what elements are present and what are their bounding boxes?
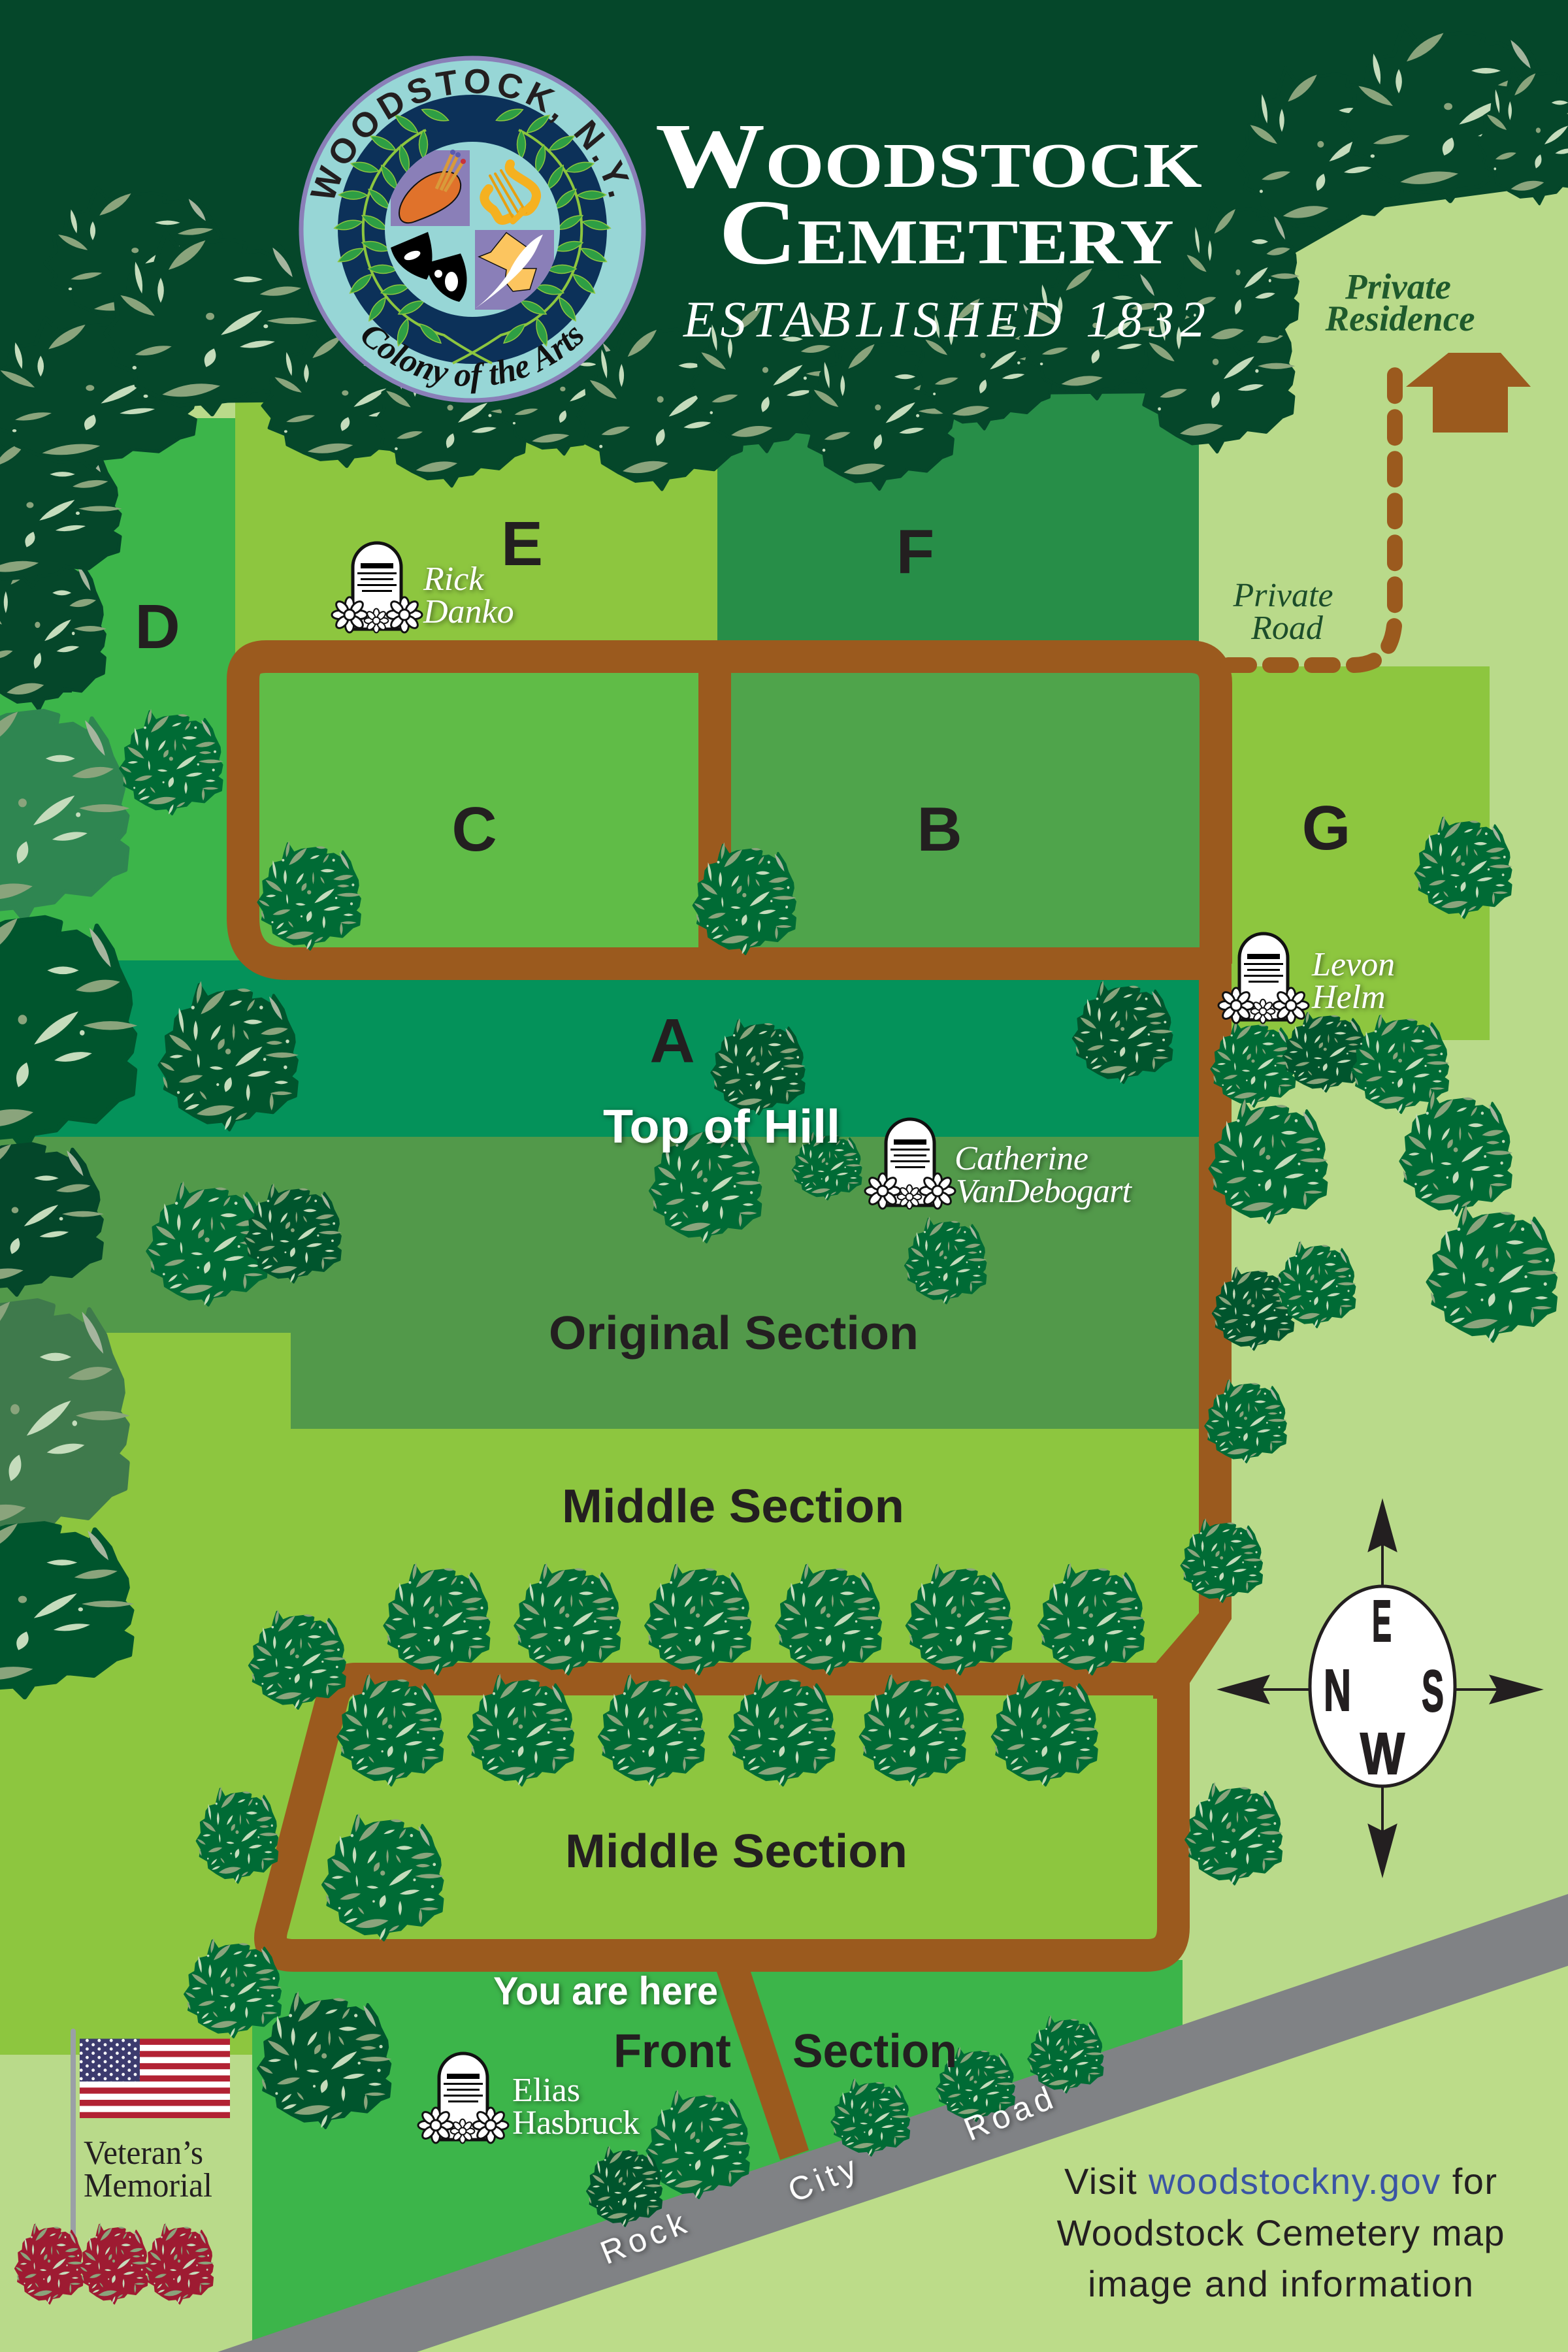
title line 2: CEMETERY [719,180,1174,284]
label E: E [501,509,543,579]
upper road loop [243,657,1216,964]
wreath right [453,106,612,363]
top of hill label: Top of Hill [603,1101,840,1153]
icon: private residence house [1406,353,1531,433]
website note: image and information [1088,2263,1473,2304]
compass letters: N [1324,1658,1351,1723]
private residence label [1324,267,1475,338]
name: Levon Helm [1311,946,1395,1016]
label B: B [917,794,962,864]
section A [0,960,1202,1137]
flag [71,2029,230,2238]
website note [1057,2161,1504,2304]
website note: Visit woodstockny.gov for [1064,2161,1497,2202]
tree: dark left upper [0,908,137,1151]
compass arrows [1218,1499,1543,1877]
seal blue ring [338,95,607,364]
left-edge trees [0,702,137,1697]
veteran's memorial label: Veteran’s [84,2134,203,2172]
rock city road [218,1894,1568,2352]
section E [235,392,719,653]
lower road loop [270,1679,1173,1955]
grounds trees [120,709,1558,2227]
section letters [135,509,1350,1076]
lawn below road [417,1966,1568,2352]
seal outer ring [301,58,644,400]
section F [717,392,1199,653]
canopy backdrop [0,0,1568,693]
label A: A [649,1006,695,1076]
private residence label: Residence [1324,299,1475,338]
tree: faded left [0,702,129,921]
original section ground [0,1137,1202,1429]
subtitle: ESTABLISHED 1832 [683,291,1205,348]
veteran's memorial label [84,2134,212,2204]
connecting road [1153,947,1232,1699]
wreath left [333,106,492,363]
private road label: Road [1250,610,1324,647]
icon: scroll and quill [474,233,543,309]
title line 1: W OODSTOCK [655,104,1202,207]
you are here: You are here [493,1969,718,2013]
headstone: Rick Danko [332,543,422,632]
seal text top: WOODSTOCK, N.Y. [310,69,630,198]
icon: theatre masks [391,232,467,302]
cemetery roads [243,657,1232,1955]
private road label: Private [1232,577,1333,614]
private road dashed [1228,359,1395,665]
section C [243,657,715,964]
red memorial bushes [15,2223,214,2304]
name: Catherine VanDebogart: Catherine [955,1140,1088,1177]
name: Levon Helm: Helm [1311,979,1386,1016]
compass letters: E [1372,1589,1392,1654]
section G [1232,666,1490,1040]
name: Elias Hasbruck: Elias [512,2072,580,2109]
label D: D [135,592,180,662]
seal: Woodstock, N.Y. [299,56,645,402]
headstone: Elias Hasbruck [418,2053,508,2143]
seal inner circle [385,142,560,317]
icon: lyre [484,164,538,221]
website note: Woodstock Cemetery map [1057,2212,1504,2253]
tree: dark left lower [0,1516,134,1697]
compass ellipse [1310,1586,1455,1786]
seal text bottom: Colony of the Arts [362,327,583,393]
icon: palette [399,150,466,223]
label G: G [1302,793,1350,863]
front label: Front [613,2025,731,2078]
name: Rick Danko: Rick [423,561,484,598]
flag pole [71,2029,76,2238]
compass letters: W [1360,1722,1405,1787]
label C: C [451,794,497,864]
purple quadrants [391,150,554,310]
original section label: Original Section [549,1307,919,1360]
tree: faded left lower [0,1290,130,1548]
name: Catherine VanDebogart: VanDebogart [956,1173,1133,1210]
label F: F [896,517,934,587]
tree: dark left middle [0,1137,104,1295]
veteran's memorial label: Memorial [84,2167,212,2204]
middle section ground [0,1333,1202,2055]
section label: Section [792,2025,957,2078]
compass letters [1324,1589,1444,1787]
flag union [80,2038,140,2082]
road name: City: City [783,2148,866,2210]
private residence label: Private [1345,267,1451,306]
name: Elias Hasbruck: Hasbruck [512,2104,640,2142]
road name: Road: Road [959,2078,1062,2148]
section D [0,418,242,967]
tree canopy along top edge [0,25,1568,710]
headstone: Catherine VanDebogart [865,1119,955,1209]
front section ground [252,1960,1183,2352]
headstone: Levon Helm [1218,934,1309,1023]
name: Levon Helm: Levon [1311,946,1395,983]
middle section label upper: Middle Section [562,1480,904,1533]
middle section label lower: Middle Section [565,1825,907,1878]
name: Rick Danko [423,561,514,630]
name: Elias Hasbruck [512,2072,640,2142]
road name: Rock: Rock [595,2203,695,2272]
name: Rick Danko: Danko [423,593,514,630]
private road label [1232,577,1333,647]
section B [715,657,1216,964]
name: Catherine VanDebogart [955,1140,1133,1210]
compass [1218,1499,1543,1877]
compass letters: S [1422,1659,1444,1724]
cross road [698,673,731,947]
road to Rock City Road [716,1970,809,2160]
